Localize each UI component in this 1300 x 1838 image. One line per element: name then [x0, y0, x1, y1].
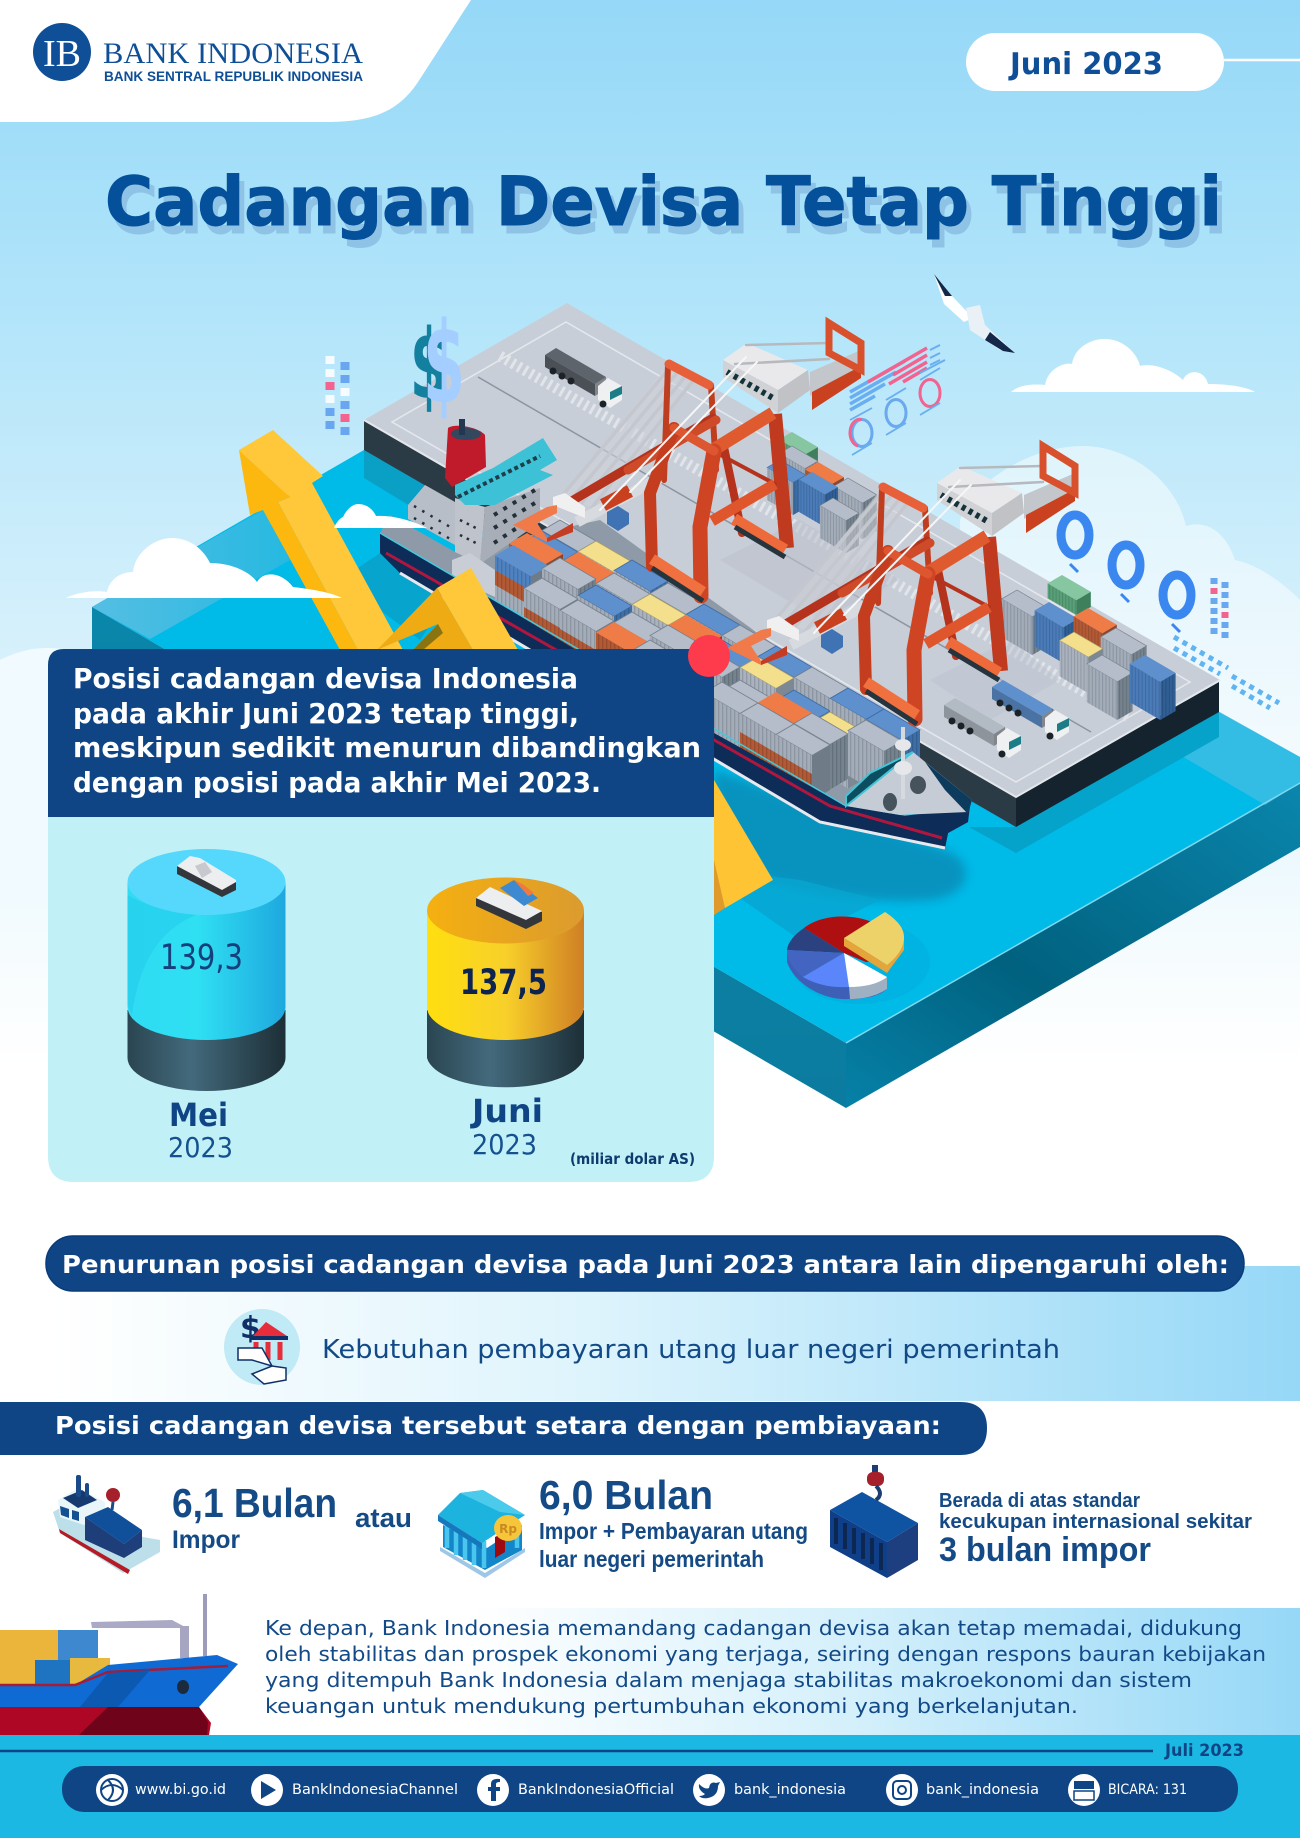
icon: contact centre — [1068, 1774, 1100, 1806]
cylinder: Mei — [128, 849, 286, 1091]
value: 3 bulan impor — [939, 1531, 1151, 1569]
instagram text: bank_indonesia — [926, 1782, 1039, 1798]
ship containers — [495, 520, 920, 800]
isometric port illustration — [66, 274, 1300, 1108]
label Juni 2023: 2023 — [472, 1128, 537, 1161]
icon: facebook — [477, 1774, 509, 1806]
cloud top right — [1011, 339, 1255, 392]
outlook band — [0, 1594, 1300, 1735]
data dots — [1174, 637, 1279, 708]
icon: container on hook — [830, 1465, 918, 1578]
icon: ship on Mei cylinder — [177, 856, 236, 897]
seagull — [934, 274, 1015, 353]
ship superstructure — [408, 419, 557, 597]
contact centre text: BICARA: 131 — [1108, 1782, 1187, 1798]
panel header: Posisi cadangan devisa Indonesia — [73, 662, 578, 695]
outlook text: yang ditempuh Bank Indonesia dalam menjaga stabilitas makroekonomi dan sistem — [265, 1668, 1192, 1692]
outlook text: Ke depan, Bank Indonesia memandang cadangan devisa akan tetap memadai, didukung — [265, 1616, 1242, 1640]
footer — [0, 1735, 1300, 1838]
panel: reserve position — [48, 635, 730, 1182]
facebook text: BankIndonesiaOfficial — [518, 1782, 674, 1798]
ship hull and deck base — [380, 515, 970, 848]
caption — [939, 1490, 1252, 1533]
big pale cloud right — [960, 446, 1300, 780]
value: 6,0 Bulan — [539, 1472, 713, 1518]
caption — [539, 1518, 808, 1572]
data column right — [1214, 578, 1225, 642]
cranes — [513, 323, 1075, 724]
data column left — [330, 356, 345, 438]
label Mei 2023 — [168, 1096, 233, 1164]
panel header: pada akhir Juni 2023 tetap tinggi, — [73, 697, 579, 730]
icon: cargo ship — [53, 1475, 160, 1574]
ship and crane shadows on water — [340, 553, 1219, 940]
ship hull side with stripe and bow deck — [380, 533, 972, 848]
item: 6,0 bulan — [438, 1472, 808, 1578]
header logo block — [0, 0, 471, 122]
website text: www.bi.go.id — [135, 1782, 226, 1798]
atau connector: atau — [355, 1503, 412, 1533]
dollar sign: $ — [423, 299, 465, 429]
caption: luar negeri pemerintah — [539, 1546, 764, 1572]
icon: bank building: Rp — [499, 1522, 517, 1536]
footer date: Juli 2023 — [1164, 1741, 1244, 1761]
pie chart — [787, 912, 930, 1004]
outlook text: oleh stabilitas dan prospek ekonomi yang terjaga, seiring dengan respons bauran kebijakan — [265, 1642, 1266, 1666]
icon: ship bow — [0, 1594, 238, 1735]
icon: website — [96, 1774, 128, 1806]
youtube text: BankIndonesiaChannel — [292, 1782, 458, 1798]
icon: Bank Indonesia emblem — [33, 23, 91, 81]
panel header: meskipun sedikit menurun dibandingkan — [73, 731, 701, 764]
yellow rising arrow — [239, 430, 773, 915]
trucks on quay bottom — [944, 680, 1069, 758]
dollar sign: $ — [410, 309, 448, 421]
panel header: dengan posisi pada akhir Mei 2023. — [73, 766, 601, 799]
pink and blue data chart — [850, 345, 945, 455]
panel header — [48, 649, 714, 817]
pill heading — [46, 1236, 1244, 1291]
label Juni 2023: Juni — [470, 1092, 543, 1130]
caption: kecukupan internasional sekitar — [939, 1511, 1252, 1533]
reason text: Kebutuhan pembayaran utang luar negeri pemerintah — [322, 1335, 1060, 1365]
small cloud over ship — [334, 504, 427, 528]
item: standard — [830, 1465, 1252, 1578]
icon: bank and hands: $ — [240, 1311, 261, 1346]
caption: Impor — [172, 1526, 240, 1554]
label Mei 2023: 2023 — [168, 1131, 233, 1164]
outlook text — [265, 1616, 1266, 1718]
date pill: Juni 2023 — [1008, 47, 1163, 82]
value Mei: 139,3 — [160, 938, 243, 978]
section band: penurunan — [0, 1236, 1300, 1401]
pill heading: Penurunan posisi cadangan devisa pada Juni 2023 antara lain dipengaruhi oleh: — [62, 1250, 1229, 1279]
value: 6,1 Bulan — [172, 1480, 337, 1526]
icon: container ship on Juni cylinder — [476, 880, 542, 929]
date pill — [966, 33, 1300, 91]
logo subtitle: BANK SENTRAL REPUBLIK INDONESIA — [104, 69, 363, 84]
logo wordmark: BANK INDONESIA — [103, 37, 363, 70]
label Mei 2023: Mei — [169, 1096, 228, 1134]
icon: twitter — [693, 1774, 725, 1806]
unit note: (miliar dolar AS) — [570, 1150, 695, 1168]
cylinder: Juni — [427, 878, 584, 1087]
outlook text: keuangan untuk mendukung pertumbuhan ekonomi yang berkelanjutan. — [265, 1694, 1078, 1718]
icon: bank building — [438, 1490, 525, 1578]
value Juni: 137,5 — [460, 963, 547, 1003]
icon: instagram — [886, 1774, 918, 1806]
quay — [364, 303, 1220, 827]
footer contact bar — [62, 1766, 1238, 1812]
containers stack near first crane — [767, 432, 877, 553]
truck on quay top — [545, 348, 622, 408]
donut charts — [1061, 515, 1191, 632]
icon: bank and hands — [224, 1309, 300, 1385]
water platform — [92, 450, 1300, 1108]
item: 6,1 bulan impor — [53, 1475, 337, 1574]
caption: Berada di atas standar — [939, 1490, 1140, 1512]
pill heading: setara — [0, 1402, 987, 1455]
label Juni 2023 — [470, 1092, 543, 1161]
containers stack near second crane — [1002, 575, 1176, 720]
pill heading: setara: Posisi cadangan devisa tersebut setara dengan pembiayaan: — [55, 1411, 941, 1440]
twitter text: bank_indonesia — [734, 1782, 846, 1798]
icon: youtube — [251, 1774, 283, 1806]
pale cloud left — [0, 648, 70, 900]
red dot — [688, 635, 730, 677]
title: Cadangan Devisa Tetap Tinggi — [105, 163, 1222, 242]
icon: Bank Indonesia emblem: IB — [43, 33, 81, 75]
cloud left — [66, 538, 342, 598]
caption: Impor + Pembayaran utang — [539, 1518, 808, 1544]
